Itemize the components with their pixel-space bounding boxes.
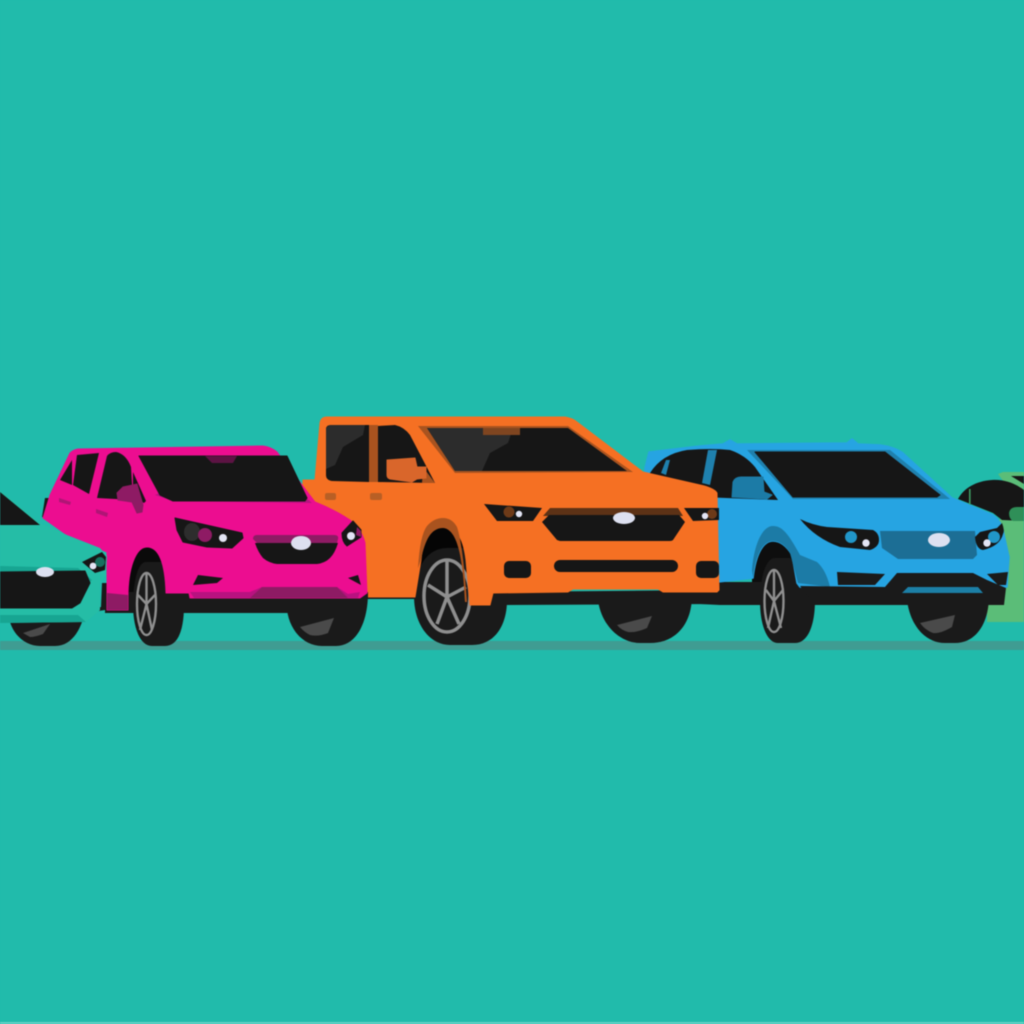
left headlight: [484, 504, 542, 521]
bumper panel: [190, 587, 360, 598]
front side window: [97, 452, 133, 500]
mirror: [732, 477, 772, 499]
door handles: [59, 498, 71, 505]
arch trim: [752, 526, 830, 587]
arch interior: [416, 520, 472, 597]
right headlight: [975, 523, 1004, 550]
front wheel: [133, 562, 184, 646]
fog lights: [193, 575, 223, 585]
left headlight: [175, 518, 243, 548]
rear black trim: [92, 583, 129, 613]
body: [43, 446, 367, 610]
right headlight: [342, 521, 361, 546]
arch trim: [418, 518, 467, 602]
car: teal sedan, left edge: [0, 490, 107, 646]
rear wheel: [598, 595, 692, 643]
windshield: [155, 490, 312, 503]
underbody: [128, 592, 368, 613]
car: magenta crossover: [42, 446, 368, 646]
left headlight: [800, 519, 879, 550]
road strip: [0, 641, 1024, 650]
front door window: [378, 425, 435, 483]
grille: [880, 531, 977, 559]
door pillar: [369, 425, 378, 482]
windshield: [747, 450, 950, 499]
body: [0, 490, 107, 623]
rear windows: [60, 460, 72, 485]
door handles: [325, 493, 336, 500]
grille: [253, 535, 338, 543]
front wheel: [760, 558, 815, 643]
lower vents: [504, 561, 531, 578]
windshield: [0, 492, 40, 525]
rear wheel: [287, 592, 368, 646]
mirror: [117, 484, 143, 513]
rear bumper patch: [107, 593, 128, 610]
arch interior: [752, 530, 798, 584]
wheel: [10, 622, 82, 646]
underbody: [367, 595, 414, 599]
body: [300, 417, 719, 605]
grille: [543, 508, 683, 516]
windshield: [418, 426, 633, 473]
underbody: [700, 582, 1004, 605]
front wheel: [414, 548, 507, 645]
mirror: [387, 458, 426, 482]
rear wheel: [907, 595, 989, 643]
lower lip: [0, 615, 86, 623]
lower bumper: [800, 573, 1006, 605]
car: blue SUV: [645, 439, 1009, 643]
car: orange pickup: [300, 417, 720, 645]
rear door window: [326, 425, 369, 482]
car: green, right edge: [958, 472, 1024, 622]
side windows: [650, 449, 778, 500]
right headlight: [684, 508, 719, 521]
headlight: [82, 552, 106, 573]
body: [645, 439, 1009, 587]
arch interior: [126, 540, 168, 610]
grille: [0, 566, 92, 584]
